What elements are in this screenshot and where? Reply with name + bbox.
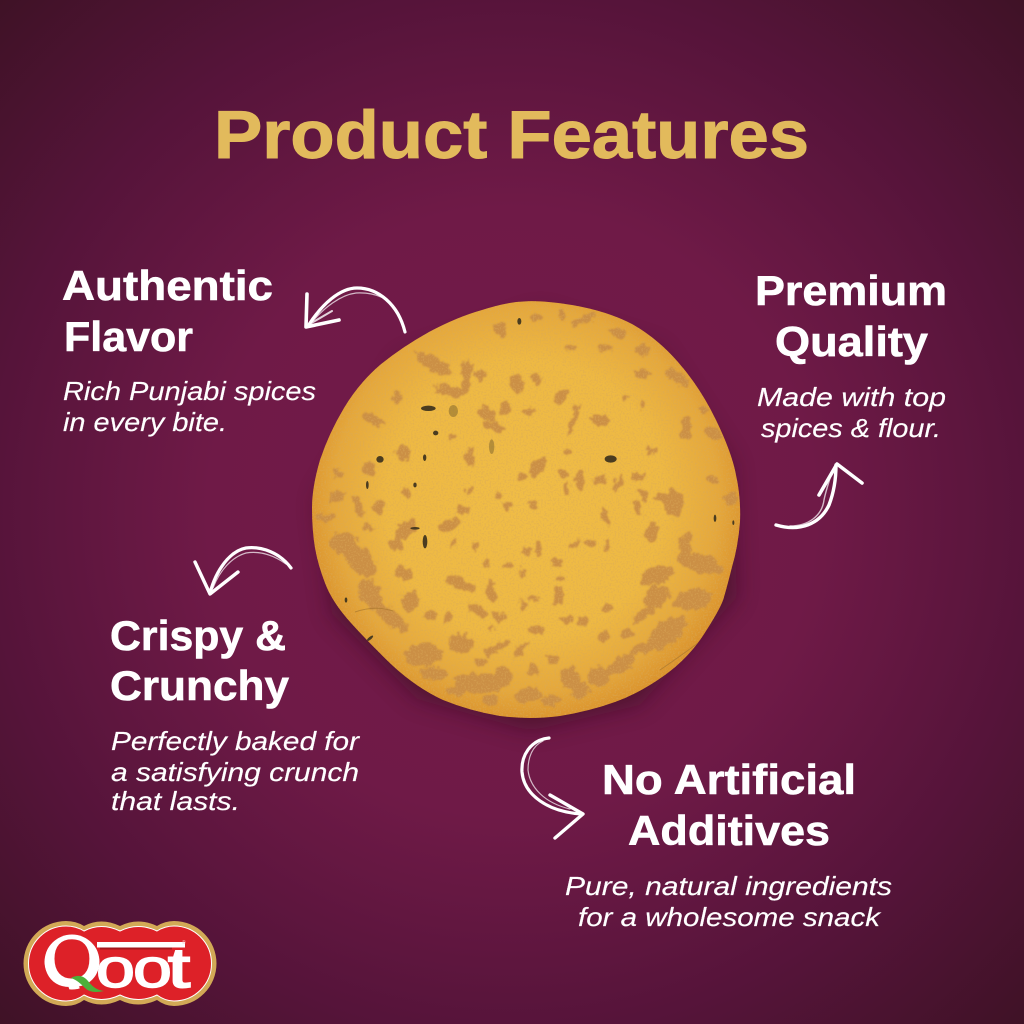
- heading: premium quality: [755, 267, 947, 365]
- feature: premium quality: [755, 267, 947, 443]
- flatbread image: [300, 290, 750, 731]
- text: authentic flavor description: Rich Punjabi spices: [63, 376, 316, 406]
- heading: premium quality: Premium: [755, 267, 947, 314]
- text: premium quality description: Made with top: [757, 382, 946, 412]
- text: no artificial additives description: Pure, natural ingredients: [565, 871, 892, 901]
- text: no artificial additives description: for a wholesome snack: [578, 902, 882, 932]
- text: no artificial additives description: [565, 871, 892, 932]
- arrow: crispy and crunchy: [195, 548, 291, 594]
- text: authentic flavor description: in every bite.: [63, 407, 227, 437]
- arrow: no artificial additives: [522, 738, 583, 838]
- heading: crispy and crunchy: Crunchy: [110, 662, 290, 709]
- feature: no artificial additives: [565, 756, 892, 932]
- text: authentic flavor description: [63, 376, 316, 437]
- logo: Qoot: ®: [182, 939, 186, 946]
- text: premium quality description: [757, 382, 946, 443]
- heading: no artificial additives: Additives: [628, 807, 830, 854]
- feature: crispy and crunchy: [110, 612, 361, 816]
- text: crispy and crunchy description: a satisfying crunch: [111, 757, 359, 787]
- text: crispy and crunchy description: [111, 726, 361, 816]
- text: crispy and crunchy description: Perfectly baked for: [111, 726, 361, 756]
- text: premium quality description: spices & flour.: [761, 413, 941, 443]
- text: crispy and crunchy description: that lasts.: [111, 786, 240, 816]
- arrow: authentic flavor: [306, 288, 405, 332]
- heading: authentic flavor: Authentic: [62, 262, 273, 309]
- heading: no artificial additives: No Artificial: [602, 756, 856, 803]
- heading: crispy and crunchy: Crispy &: [110, 612, 286, 659]
- heading: no artificial additives: [602, 756, 856, 854]
- heading: crispy and crunchy: [110, 612, 290, 709]
- logo: Qoot: o: [133, 937, 172, 999]
- logo: Qoot: [24, 917, 217, 1006]
- heading: authentic flavor: Flavor: [64, 313, 193, 360]
- title: Product Features: [214, 97, 809, 173]
- arrow: premium quality: [776, 464, 862, 528]
- heading: premium quality: Quality: [775, 318, 929, 365]
- logo: Qoot: t: [168, 936, 191, 999]
- logo: Qoot: Q: [42, 917, 102, 1002]
- logo: Qoot: o: [96, 937, 135, 999]
- heading: authentic flavor: [62, 262, 273, 360]
- feature: authentic flavor: [62, 262, 316, 437]
